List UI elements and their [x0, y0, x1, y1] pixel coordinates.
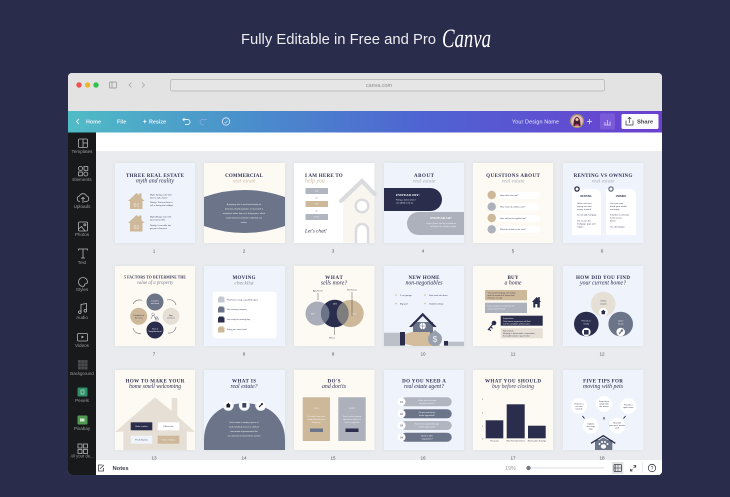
subheading: real estate: [592, 178, 615, 184]
house 01: 01: [134, 203, 140, 209]
heading: HOW TO MAKE YOUR: [126, 379, 185, 384]
bar chart: 0: [482, 438, 484, 440]
venn labels: Apartment: [313, 290, 323, 292]
renting column: paying rent and: [577, 205, 592, 208]
info boxes: that you can get: [488, 296, 503, 300]
heading: THREE REAL ESTATE: [126, 174, 185, 179]
tip bubbles: [571, 396, 636, 434]
question pills: Want to be guided through: [415, 423, 440, 426]
option buttons: [131, 422, 179, 444]
tip bubbles: Maintain: [613, 422, 622, 424]
band text: A property that is used exclusively for: [227, 203, 261, 206]
checklist panel: [213, 292, 277, 338]
heading: RENTING VS OWNING: [574, 174, 632, 179]
band text: business-related purposes or to provide a: [225, 208, 264, 210]
subheading: home smell welcoming: [129, 384, 181, 390]
slide number 2: 2: [243, 248, 246, 254]
sidebar item: Templates: Templates: [72, 149, 93, 154]
slide number 12: 12: [599, 352, 605, 356]
zoom control: [505, 466, 604, 472]
subheading: help you: [305, 178, 325, 184]
info boxes: Down payment amount to the: [488, 304, 515, 308]
venn labels: [313, 288, 358, 340]
slide 13: how to make your home smell welcoming: [115, 370, 195, 450]
owning column: builds your wealth: [610, 205, 627, 208]
heading: DO'S: [328, 379, 341, 384]
question rows: [488, 191, 540, 234]
option buttons: Diffuse oils: [163, 426, 174, 428]
sidebar item: Photos: [75, 222, 90, 237]
dome text: land including natural or artificial: [229, 426, 259, 428]
icon: key: [488, 321, 496, 331]
bar chart: [482, 399, 546, 442]
heading: COMMERCIAL: [225, 174, 264, 179]
sidebar item: Audio: [76, 304, 88, 320]
info boxes: Your home inspection will find: [503, 320, 531, 323]
navy pill: INSTEAD OFF:: [396, 193, 420, 197]
info boxes: and the amount of home loan: [488, 294, 515, 297]
slide number 17: 17: [510, 455, 516, 460]
title: [241, 24, 491, 53]
gray pill: INSTEAD OF:: [430, 216, 452, 220]
heading: WHAT IS: [232, 379, 256, 384]
venn labels: House: [329, 338, 336, 340]
slide 5: questions about real estate: [473, 163, 553, 243]
wave band: [204, 190, 285, 233]
sidebar item: Uploads: [74, 194, 91, 209]
bar chart: Pre-Loan: [490, 440, 500, 442]
venn circles: 20%: [352, 314, 356, 316]
checklist panel: Enjoy your new home!: [227, 328, 248, 331]
myth text: sell is during the holidays: [150, 204, 173, 207]
sidebar item: Styles: Styles: [76, 287, 89, 292]
owning column: Can't you own: [610, 202, 624, 205]
slide number 13: 13: [151, 455, 157, 460]
question pills: 02: [400, 412, 404, 416]
navy pill: can afford to do so: [396, 202, 414, 204]
tip bubbles: quiet room: [623, 406, 633, 409]
slide 9: what sells more venn diagram: [294, 266, 374, 346]
subheading: and don'ts: [322, 384, 347, 390]
renting column: RENTING: [580, 195, 592, 198]
tip bubbles: records: [576, 408, 582, 410]
sidebar item: Videos: Videos: [75, 343, 90, 348]
slide number 10: 10: [420, 352, 426, 356]
question pills: Need to offer: [421, 434, 433, 437]
gray pill: [407, 212, 464, 235]
subheading: real estate?: [230, 384, 258, 390]
option buttons: Bake cookies: [135, 426, 148, 428]
button stack: [306, 188, 328, 220]
tip bubbles: Prepare a: [574, 402, 584, 406]
slide number 8: 8: [243, 352, 246, 356]
myth text: Myth: Spring is the best: [150, 194, 172, 196]
heading: HOW DID YOU FIND: [576, 276, 630, 281]
pet house icon: [591, 436, 615, 450]
slide 14: what is real estate: [204, 370, 285, 450]
myth text: your lowest offer: [150, 218, 166, 222]
checklist panel: Hire moving company: [227, 308, 248, 311]
subheading: moving with pets: [583, 384, 624, 390]
button stack: Buy: [315, 191, 319, 193]
house and handover illustration: $: [433, 335, 438, 344]
navy pill: [384, 188, 442, 211]
sidebar item: Pexels: Pexels: [75, 398, 90, 403]
question pills: all the legal work?: [419, 426, 436, 429]
slide 3: I am here to help you: [294, 163, 374, 243]
heading: WHAT YOU SHOULD: [485, 379, 541, 384]
do panel: budget fits with your: [307, 418, 326, 421]
slide 15: do's and don'ts: [294, 370, 374, 450]
subheading: real estate: [233, 178, 256, 184]
myth text: Reality: The best time to: [150, 201, 173, 204]
renting column: repairs: [577, 226, 583, 228]
view icons: [612, 462, 656, 474]
bar chart: 1: [482, 426, 484, 428]
don't panel: [338, 397, 366, 441]
bullet list: Vaulted ceilings: [429, 302, 443, 306]
heading: WHAT: [325, 276, 344, 281]
do panel: DO'S: [314, 408, 319, 410]
tip bubbles: Provide a: [624, 404, 634, 406]
editor toolbar: Resize: [149, 120, 166, 126]
owning column: [606, 187, 636, 235]
renting column: mortgage, pays and: [577, 222, 596, 226]
notes and zoom footer: [96, 460, 662, 475]
heading: QUESTIONS ABOUT: [486, 174, 541, 179]
info boxes: amount you'll need: [488, 308, 506, 310]
subheading: myth and reality: [136, 178, 174, 184]
circle: online search: search: [600, 302, 607, 306]
question rows: What do rentals in the area?: [500, 228, 527, 231]
heading: DO YOU NEED A: [402, 379, 446, 384]
band text: estate.: [241, 221, 248, 224]
button stack: or: [316, 210, 318, 212]
checklist panel: Find home using a qualified agent: [227, 298, 258, 302]
option buttons: Fresh flowers: [135, 438, 148, 442]
question rows: How old is the roof?: [500, 194, 519, 197]
owning column: home as you: [610, 218, 623, 220]
do panel: [303, 397, 330, 441]
myth text: time to sell a home: [150, 196, 168, 200]
bullet list: Big yard: [400, 302, 408, 306]
venn labels: Penthouse: [347, 288, 358, 292]
venn circles: [306, 300, 364, 327]
sidebar item: Videos: [75, 334, 90, 348]
house illustration: [341, 181, 374, 243]
house 02: 02: [134, 225, 140, 231]
slide 11: buy a home: [473, 266, 553, 346]
question pills: home appraised?: [419, 414, 436, 417]
factor circles: [130, 294, 180, 338]
heading: 5 FACTORS TO DETERMINE THE: [124, 276, 186, 280]
bullet list: 2 car garage: [400, 294, 413, 297]
slide 12: how did you find your current home: [563, 266, 644, 346]
sidebar item: Text: Text: [78, 260, 87, 265]
myth text: Myth: Always start with: [150, 216, 172, 218]
owning column: OWNING: [616, 195, 626, 198]
bar chart: 2: [482, 412, 484, 414]
slide number 4: 4: [422, 248, 425, 254]
browser window: [68, 73, 662, 475]
editor toolbar: Home: [86, 120, 101, 126]
info boxes: [485, 290, 543, 338]
sidebar item: Background: [70, 360, 94, 376]
white ruler strip: [96, 132, 662, 151]
slide 8: moving checklist: [204, 266, 285, 346]
question pills: [398, 397, 452, 442]
circle: open house: [608, 312, 633, 336]
icon badges: [223, 400, 266, 411]
subheading: a home: [505, 280, 522, 286]
tip bubbles: Update: [587, 422, 595, 426]
dome text: man-made improvements that: [230, 430, 258, 433]
renting column: money it saved: [577, 208, 592, 211]
owning column: Freedom to renovate: [610, 214, 630, 216]
slide number 18: 18: [599, 455, 605, 460]
band text: workplace rather than as a living space, which: [223, 212, 266, 215]
button stack: Sell: [315, 204, 319, 206]
slide number 1: 1: [153, 248, 156, 254]
sidebar item: All your designs: [70, 444, 94, 458]
factor circles: the area: [135, 316, 143, 320]
slide 16: do you need a real estate agent: [384, 370, 464, 450]
subheading: sells more?: [321, 280, 347, 286]
subheading: checklist: [234, 280, 254, 286]
slide 2: commercial real estate: [204, 163, 285, 243]
slide 10: new home non-negotiables: [384, 266, 464, 346]
navy pill: Fixing a home when I: [396, 200, 416, 202]
slide number 11: 11: [511, 352, 516, 356]
editor toolbar: ✦: [142, 120, 147, 126]
slide number 9: 9: [332, 352, 335, 356]
sidebar item: Elements: Elements: [72, 177, 92, 182]
slide number 15: 15: [330, 455, 336, 460]
tip bubbles: your pets' routine: [609, 424, 626, 427]
subheading: your current home?: [579, 280, 626, 286]
band text: [223, 203, 266, 224]
factor circles: Condition of: [133, 314, 145, 317]
tip bubbles: post: [615, 426, 620, 430]
factor circles: and size: [167, 318, 176, 320]
circle: open house: house: [618, 324, 624, 326]
factor circles: Size &: [152, 328, 159, 330]
sidebar item: Templates: [72, 139, 93, 154]
subheading: real estate: [413, 178, 436, 184]
question pills: 01: [400, 400, 404, 404]
subheading: value of a property: [137, 281, 174, 286]
heading: BUY: [508, 276, 519, 281]
zoom control: 19%: [505, 466, 516, 472]
sidebar: [68, 132, 96, 475]
title: Fully Editable in Free and Pro: [241, 31, 436, 48]
subheading: real estate: [502, 178, 525, 184]
info boxes: Renovation: [503, 330, 514, 332]
sidebar item: Elements: [72, 166, 92, 182]
slide 18: five tips for moving with pets: [563, 370, 644, 450]
factor circles: Age: [169, 314, 174, 317]
factor circles: and area: [151, 302, 160, 305]
button stack: Invest: [314, 216, 320, 219]
browser title bar: [68, 73, 662, 111]
bar chart: New Furniture/Deco: [506, 440, 526, 442]
sidebar item: Pixabay: Pixabay: [74, 426, 91, 431]
slide 17: what you should buy before closing: [473, 370, 553, 450]
slide number 6: 6: [601, 248, 604, 254]
icon: house: [532, 297, 541, 308]
do panel: Do make sure your: [308, 415, 325, 418]
owning column: desire: [610, 220, 617, 222]
subheading: non-negotiables: [406, 280, 443, 286]
sidebar item: Pexels: [75, 388, 90, 403]
gray pill: sell when the market is right: [430, 225, 456, 228]
gray pill: Keep a home and try to maintain: [426, 222, 457, 225]
factor circles: Neighborhood: [148, 330, 162, 333]
browser title bar: canva.com: [366, 83, 393, 89]
owning column: Tax advantages: [610, 226, 625, 228]
center people icon: [151, 313, 158, 320]
renting column: Often can't own: [577, 202, 592, 205]
question pills: 04: [400, 435, 404, 439]
tip bubbles: away from: [599, 402, 609, 406]
editor toolbar: File: [117, 120, 126, 126]
heading: ABOUT: [414, 174, 435, 179]
subheading: real estate agent?: [404, 384, 444, 390]
view icons: ?: [651, 466, 654, 472]
sidebar item: Pixabay: [74, 416, 91, 431]
circle: online search: [591, 292, 616, 316]
tip bubbles: Keep them: [599, 400, 609, 403]
heading: MOVING: [232, 276, 256, 281]
slide 1: three real estate myth and reality: [115, 163, 195, 243]
slide number 16: 16: [420, 455, 426, 460]
myth text: get you a fair price: [150, 227, 168, 230]
pointing arrows: [582, 416, 626, 420]
editor toolbar: Share: [637, 120, 654, 126]
bar chart: Renovation Savings: [528, 440, 546, 442]
sidebar item: Styles: [76, 278, 89, 292]
circle: open house: Open: [618, 320, 624, 322]
renting column: Do not add mortgage: [577, 214, 597, 216]
heading: I AM HERE TO: [305, 174, 343, 179]
don't panel: DON'T: [349, 408, 356, 410]
editor toolbar: Your Design Name: [512, 120, 559, 126]
option buttons: Open windows: [162, 440, 175, 442]
notes button: Notes: [112, 466, 129, 472]
renting column: [572, 187, 601, 235]
slide number 5: 5: [512, 248, 515, 254]
question pills: 03: [400, 424, 404, 428]
factor circles: Location: [151, 300, 160, 302]
question rows: How much do utilities cost?: [500, 206, 526, 208]
question pills: Do you need your: [419, 411, 436, 414]
venn circles: 60%: [311, 314, 315, 316]
sidebar item: Audio: Audio: [76, 315, 88, 320]
title: Canva: [442, 24, 491, 53]
bullet list: [395, 294, 448, 306]
tip bubbles: their tags: [586, 425, 595, 428]
question pills: Is this your first time: [418, 399, 437, 402]
myth text: [150, 194, 173, 230]
circle: friends or family: Friends or: [582, 320, 591, 322]
sidebar item: Text: [78, 249, 88, 265]
checklist panel: Get ready for moving day: [227, 318, 251, 321]
house shape: [115, 397, 195, 450]
button stack: or: [316, 196, 318, 200]
slide 7: factors to determine value: [115, 266, 195, 346]
bar chart: 3: [482, 399, 484, 401]
info boxes: Your loan/mortgage rate today: [488, 292, 516, 294]
circle: friends or family: [574, 312, 599, 336]
cycle arrows: [133, 300, 176, 334]
info boxes: that adds value to your home: [503, 334, 531, 338]
dome text: [228, 421, 261, 438]
sidebar item: Uploads: Uploads: [74, 204, 91, 209]
don't panel: Don't make rushing: [343, 415, 362, 418]
do panel: financing: [312, 422, 321, 424]
question pills: buying a house?: [419, 403, 435, 405]
sidebar item: Photos: Photos: [75, 232, 90, 237]
slide number 3: 3: [332, 248, 335, 254]
don't panel: home inspection: [344, 421, 360, 424]
tip bubbles: the mover: [599, 405, 609, 408]
circle: online search: Online: [600, 300, 607, 302]
circle: friends or family: family: [584, 324, 590, 326]
closing script: Let's chat!: [304, 228, 327, 234]
dome text: are attached or found when owned.: [228, 434, 261, 438]
info boxes: Manage a house with a renovation: [503, 332, 536, 335]
dome: [204, 403, 285, 450]
info boxes: Inspections: [503, 317, 514, 320]
dome text: Real estate is simply a piece of: [230, 421, 259, 424]
sidebar item: Background: Background: [70, 371, 94, 376]
slide 6: renting vs owning: [563, 163, 644, 243]
slide number 14: 14: [241, 455, 247, 460]
band text: would instead constitute residential real: [226, 216, 263, 220]
myth text: Reality: It can offer low: [150, 224, 171, 227]
window frame: [68, 73, 662, 475]
sidebar item: All your designs: All your de...: [70, 454, 94, 458]
slide number 7: 7: [153, 352, 156, 356]
heading: FIVE TIPS FOR: [583, 379, 623, 384]
owning column: and equity: [610, 208, 621, 211]
subheading: buy before closing: [492, 383, 534, 390]
bullet list: Feet work with trees: [429, 294, 448, 297]
editor toolbar: [68, 111, 662, 132]
renting column: The to own the: [577, 220, 592, 222]
question rows: How old are the appliances?: [500, 217, 527, 220]
info boxes: out the condition of the home: [503, 322, 531, 326]
don't panel: decisions without a: [343, 418, 362, 421]
tip bubbles: tags: [589, 428, 593, 430]
tip bubbles: vet visit: [576, 405, 583, 408]
slide 4: about real estate: [384, 163, 464, 243]
venn circles: 20%: [333, 304, 337, 306]
question pills: negotiation?: [421, 437, 434, 440]
notes button: [98, 465, 129, 472]
heading: NEW HOME: [408, 276, 440, 281]
